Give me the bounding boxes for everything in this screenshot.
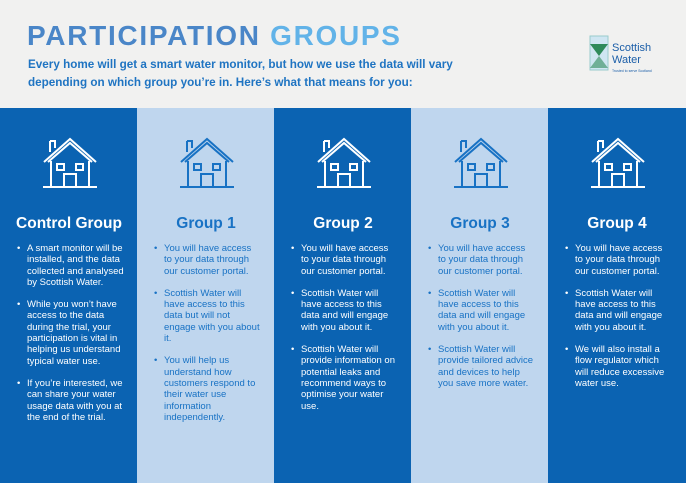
text: group 3 bullets: Scottish Water will have access to this data and will engage with you about it. xyxy=(438,288,525,333)
panel: group 2 xyxy=(274,108,412,483)
text: control group bullets: A smart monitor will be installed, and the data collected and analysed by Scottish Water. xyxy=(27,243,124,288)
icon: house xyxy=(43,138,97,188)
text: control group bullets: While you won’t have access to the data during the trial, your participation is vital in helping us understand typical water use. xyxy=(27,299,120,367)
text: group 4 bullets: Scottish Water will have access to this data and will engage with you about it. xyxy=(575,288,662,333)
text: group 1 bullets: Scottish Water will have access to this data but will not engage with you about it. xyxy=(164,288,260,344)
logo: Scottish Water: Water xyxy=(612,54,641,66)
panel: group 1: Group 1 xyxy=(176,215,236,232)
text: group 4 bullets xyxy=(565,243,664,389)
title: PARTICIPATION GROUPS xyxy=(27,20,402,51)
subtitle: Every home will get a smart water monitor, but how we use the data will vary depending on which group you’re in. Here’s what that means for you: xyxy=(28,58,453,89)
text: group 3 bullets xyxy=(428,243,533,389)
text: group 4 bullets: You will have access to your data through our customer portal. xyxy=(575,243,662,277)
panel: control group: Control Group xyxy=(16,215,122,232)
panel: group 3: Group 3 xyxy=(450,215,510,232)
icon: house xyxy=(591,138,645,188)
text: group 1 bullets xyxy=(154,243,260,423)
text: group 2 bullets: Scottish Water will provide information on potential leaks and recommend ways to optimise your water use. xyxy=(301,344,395,412)
panel: group 1 xyxy=(137,108,275,483)
text: group 1 bullets: You will have access to your data through our customer portal. xyxy=(164,243,251,277)
text: control group bullets xyxy=(17,243,124,423)
text: group 2 bullets: Scottish Water will have access to this data and will engage with you about it. xyxy=(301,288,388,333)
text: group 3 bullets: You will have access to your data through our customer portal. xyxy=(438,243,525,277)
panel: group 3 xyxy=(411,108,549,483)
icon: house xyxy=(454,138,508,188)
logo: Scottish Water: Trusted to serve Scotland xyxy=(612,69,652,73)
logo: Scottish Water xyxy=(590,36,652,73)
text: group 2 bullets: You will have access to your data through our customer portal. xyxy=(301,243,388,277)
logo: Scottish Water: Scottish xyxy=(612,42,651,54)
icon: house xyxy=(317,138,371,188)
icon: house xyxy=(180,138,234,188)
text: group 3 bullets: Scottish Water will provide tailored advice and devices to help you save more water. xyxy=(438,344,533,389)
panel: group 4: Group 4 xyxy=(587,215,647,232)
text: group 1 bullets: You will help us understand how customers respond to their water use information independently. xyxy=(164,355,255,423)
panel: control group xyxy=(0,108,138,483)
panel: group 4 xyxy=(548,108,686,483)
text: group 2 bullets xyxy=(291,243,395,412)
panel: group 2: Group 2 xyxy=(313,215,373,232)
text: group 4 bullets: We will also install a flow regulator which will reduce excessive water use. xyxy=(575,344,664,389)
text: control group bullets: If you’re interested, we can share your water usage data with you at the end of the trial. xyxy=(27,378,123,423)
